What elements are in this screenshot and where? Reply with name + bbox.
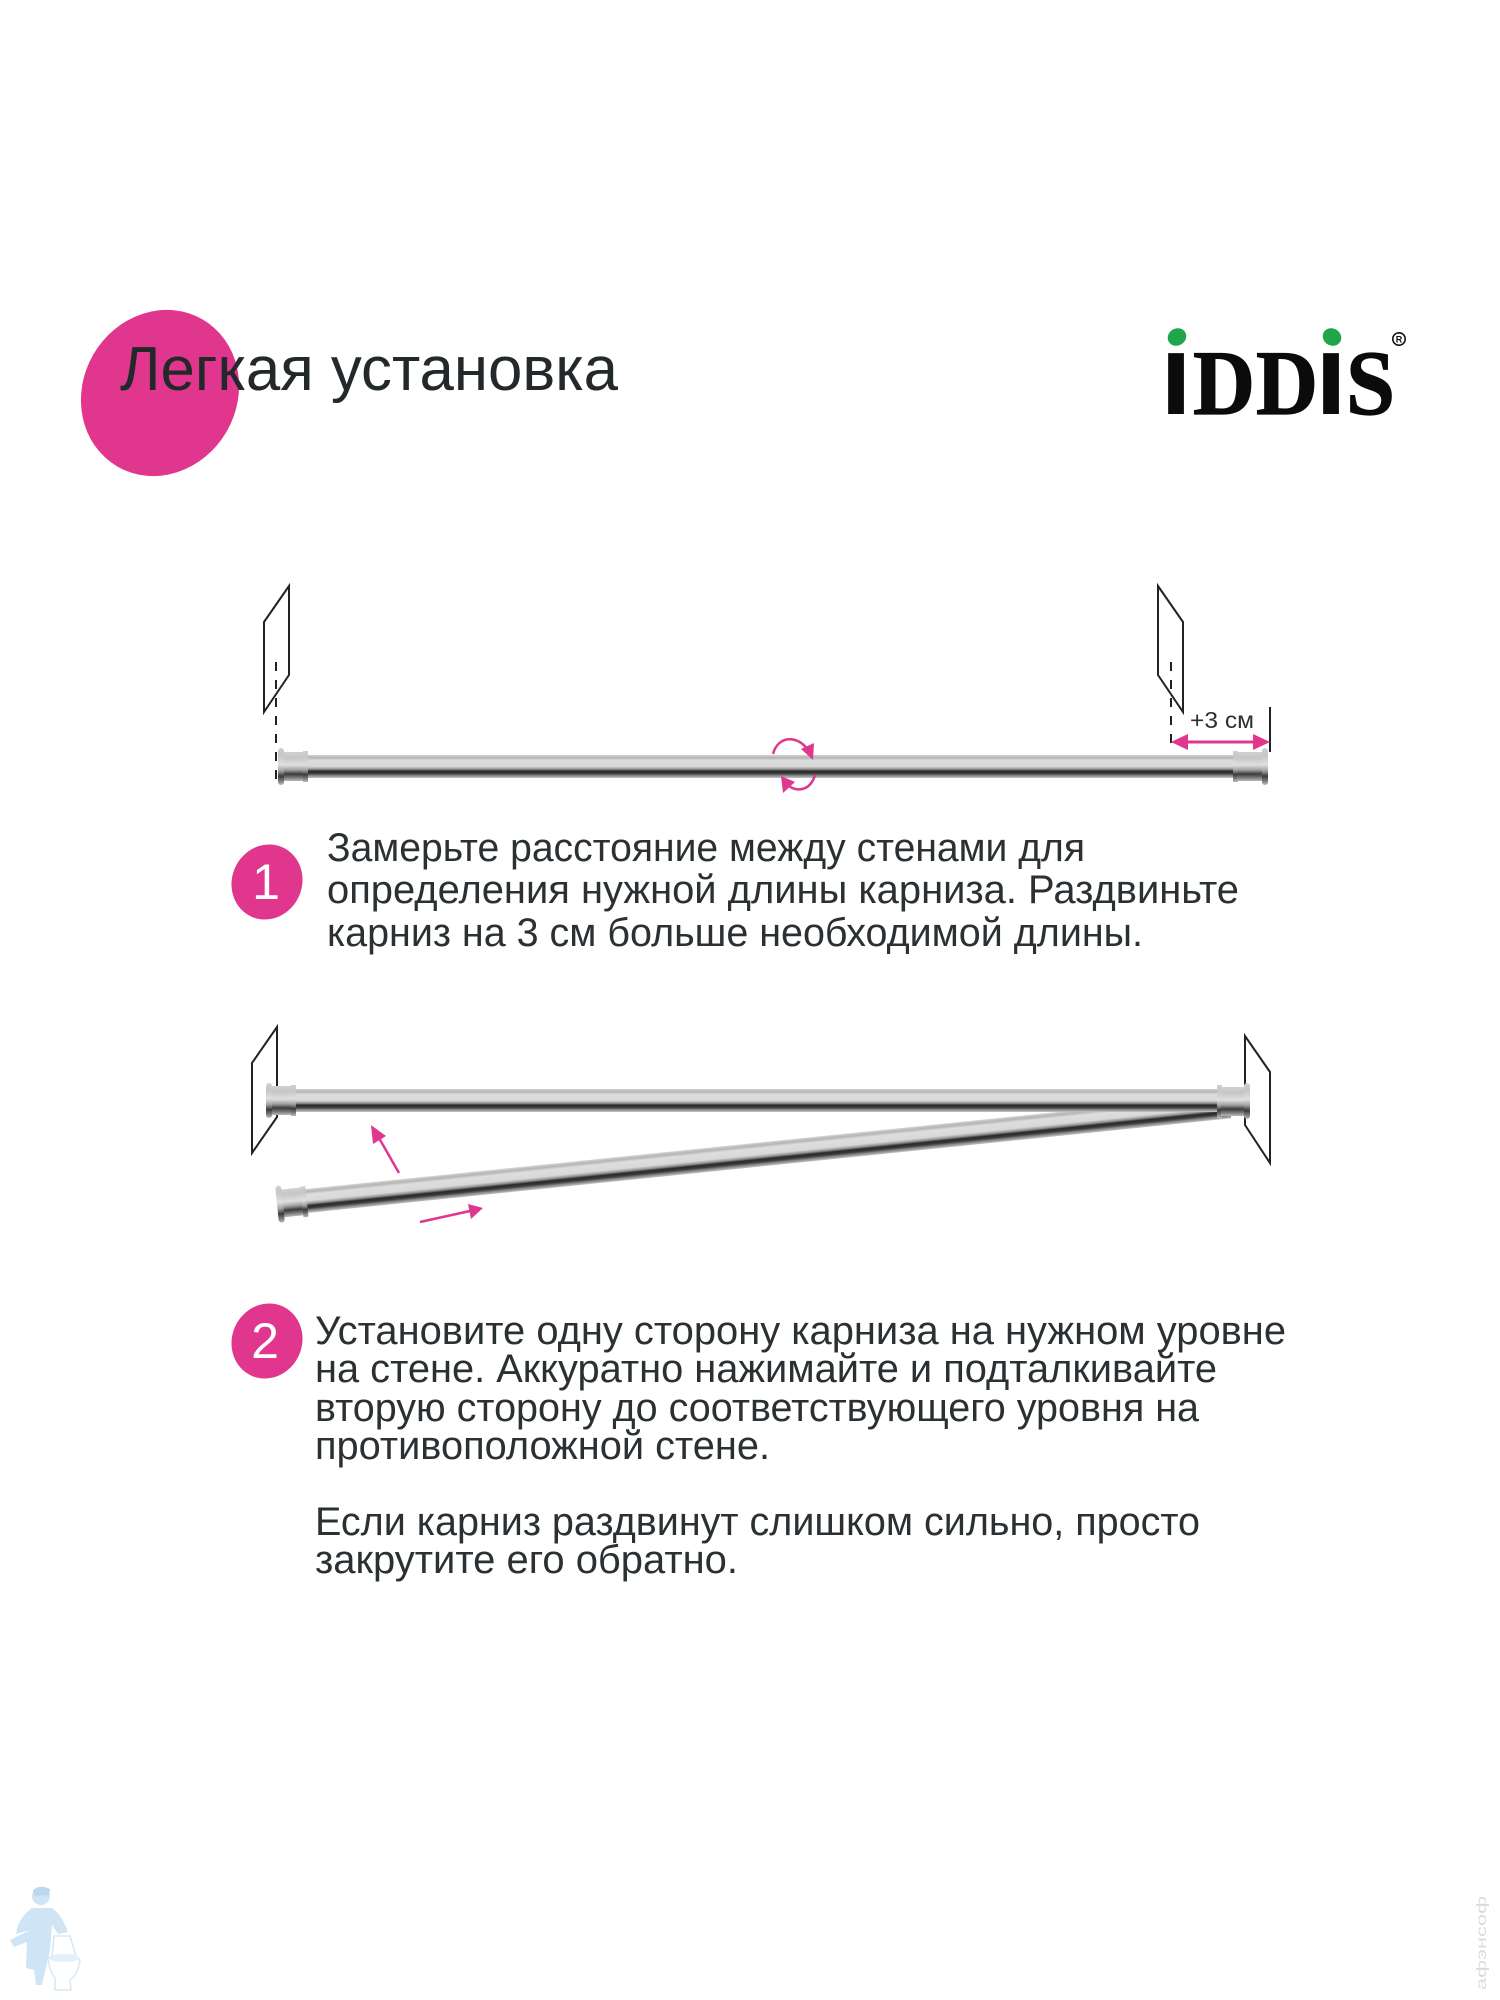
dimension arrow and label [1171, 707, 1270, 750]
horizontal rod [266, 1083, 1250, 1119]
logo: IDDIS: ı [1160, 311, 1192, 439]
right wall [1158, 586, 1183, 712]
step 2 text: закрутите его обратно. [315, 1538, 738, 1582]
right wall [1245, 1036, 1270, 1163]
logo: IDDIS: R [1396, 334, 1403, 344]
right dashed guide [1170, 662, 1172, 752]
step 2 badge [220, 1292, 314, 1390]
step 1 text [327, 826, 1239, 955]
step 2 badge: 2 [251, 1313, 279, 1369]
logo: IDDIS: D [1193, 332, 1255, 434]
dimension arrow and label: +3 см [1190, 707, 1254, 733]
slanted rod [275, 1088, 1232, 1223]
rod [278, 748, 1268, 785]
left wall [264, 586, 289, 712]
logo: IDDIS: S [1346, 332, 1395, 434]
watermark: plumber with toilet [10, 1887, 80, 1990]
left dashed guide [275, 662, 277, 783]
step 1 text: Замерьте расстояние между стенами для [327, 826, 1085, 870]
rotation arrows [773, 739, 815, 793]
watermark: vertical site label: афэнсоф [1473, 1896, 1489, 1990]
logo: IDDIS: D [1256, 332, 1318, 434]
title: Легкая установка [120, 335, 619, 404]
step 1 badge [220, 833, 314, 931]
step 2 text: на стене. Аккуратно нажимайте и подталкивайте [315, 1347, 1217, 1391]
step 1 badge: 1 [252, 854, 280, 910]
step 1 text: карниз на 3 см больше необходимой длины. [327, 911, 1143, 955]
logo: IDDIS: ı [1315, 311, 1347, 439]
step 2 text: противоположной стене. [315, 1424, 770, 1468]
step 2 text: Установите одну сторону карниза на нужном уровне [315, 1309, 1286, 1353]
diagram: step 1, rod between walls [264, 586, 1270, 793]
extension tick [1269, 707, 1271, 752]
left wall [252, 1027, 277, 1153]
pink blob behind title [51, 281, 269, 505]
logo: IDDIS [1160, 311, 1405, 439]
diagram: step 2, installing rod [252, 1027, 1270, 1223]
step 2 text: вторую сторону до соответствующего уровня на [315, 1386, 1200, 1430]
step 2 text [315, 1309, 1286, 1582]
step 2 text: Если карниз раздвинут слишком сильно, просто [315, 1500, 1200, 1544]
arrow right [420, 1204, 483, 1222]
step 1 text: определения нужной длины карниза. Раздвиньте [327, 868, 1239, 912]
arrow up-left [371, 1125, 399, 1173]
